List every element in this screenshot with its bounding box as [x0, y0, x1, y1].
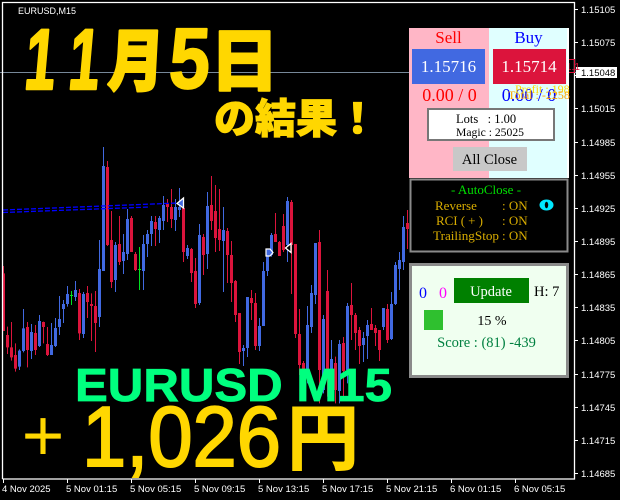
panel: trade controls: 1.15714: [501, 57, 557, 76]
time axis: 5 Nov 21:15: [386, 484, 437, 495]
current price tag: 1.15048: [581, 68, 615, 79]
panel: score: 0: [439, 285, 447, 302]
panel: AutoClose: : ON: [502, 198, 528, 213]
price axis: 1.15105: [581, 5, 615, 16]
trend dashed lines: [3, 203, 178, 212]
price axis: 1.15015: [581, 104, 615, 115]
panel: score: 0: [419, 285, 427, 302]
icon: status indicator: [540, 200, 554, 210]
price axis: 1.14715: [581, 436, 615, 447]
panel: trade controls: All Close: [462, 152, 517, 168]
title: date: 5: [167, 10, 213, 106]
panel: AutoClose: - AutoClose -: [451, 182, 521, 197]
time axis: 4 Nov 2025: [2, 484, 51, 495]
panel: AutoClose: TrailingStop: [433, 228, 499, 243]
title: date: 月: [106, 8, 167, 105]
panel: trade controls: Lots : 1.00: [456, 112, 516, 126]
time axis: 5 Nov 13:15: [258, 484, 309, 495]
subtitle: result: の結果！: [214, 85, 378, 145]
order price box: 1.1: [566, 62, 580, 73]
profit amount: [18, 380, 359, 485]
symbol label: EURUSD,M15: [18, 6, 76, 16]
panel: trade controls: 0.00 / 0: [502, 85, 556, 105]
icon: trade marker left: [177, 198, 184, 208]
icon: trade marker right: [286, 244, 291, 252]
panel: score: Score : (81) -439: [437, 335, 536, 351]
profit amount: 1,026: [82, 390, 281, 485]
panel: trade controls: Magic : 25025: [456, 125, 524, 139]
title: date: 日: [210, 7, 279, 105]
time axis: 5 Nov 01:15: [66, 484, 117, 495]
candlestick chart: [4, 147, 408, 403]
title: date: 1: [21, 12, 60, 108]
panel: AutoClose: [410, 180, 568, 252]
price axis: 1.14955: [581, 171, 615, 182]
panel: trade controls: Sell: [435, 28, 462, 47]
time axis: 5 Nov 09:15: [194, 484, 245, 495]
panel: score: 15 %: [477, 314, 507, 329]
panel: trade controls: [409, 28, 569, 178]
price axis: 1.14685: [581, 469, 615, 480]
time axis: 6 Nov 05:15: [514, 484, 565, 495]
panel: score: Update: [470, 284, 512, 300]
time axis: 5 Nov 05:15: [130, 484, 181, 495]
panel: AutoClose: : ON: [502, 228, 528, 243]
profit amount: 円: [287, 380, 359, 485]
price axis: 1.14895: [581, 237, 615, 248]
time axis: [2, 479, 565, 495]
panel: trade controls: Buy: [514, 28, 543, 47]
panel: score: [410, 264, 568, 376]
price axis: 1.14985: [581, 138, 615, 149]
profit amount: ＋: [18, 398, 68, 470]
panel: AutoClose: : ON: [502, 213, 528, 228]
time axis: 5 Nov 17:15: [322, 484, 373, 495]
price axis: [574, 5, 615, 480]
title: date: [21, 7, 279, 108]
pair and timeframe label: EURUSD M15: [75, 359, 392, 411]
icon: trade marker middle: [266, 249, 273, 256]
panel: AutoClose: Reverse: [435, 198, 477, 213]
price axis: 1.14925: [581, 204, 615, 215]
profit overlay text: Total : -2258: [508, 88, 570, 102]
panel: score: H: 7: [534, 284, 559, 300]
price axis: 1.14865: [581, 270, 615, 281]
panel: AutoClose: RCI ( + ): [436, 213, 483, 228]
profit overlay text: Profit : 198: [515, 82, 570, 96]
title: date: 1: [65, 12, 104, 108]
price axis: 1.14805: [581, 336, 615, 347]
order price box: [558, 60, 580, 73]
price axis: 1.14775: [581, 370, 615, 381]
panel: trade controls: 1.15716: [421, 57, 476, 76]
price axis: 1.14835: [581, 303, 615, 314]
price axis: 1.15075: [581, 38, 615, 49]
panel: trade controls: 0.00 / 0: [422, 85, 477, 105]
time axis: 6 Nov 01:15: [450, 484, 501, 495]
price axis: 1.14745: [581, 403, 615, 414]
